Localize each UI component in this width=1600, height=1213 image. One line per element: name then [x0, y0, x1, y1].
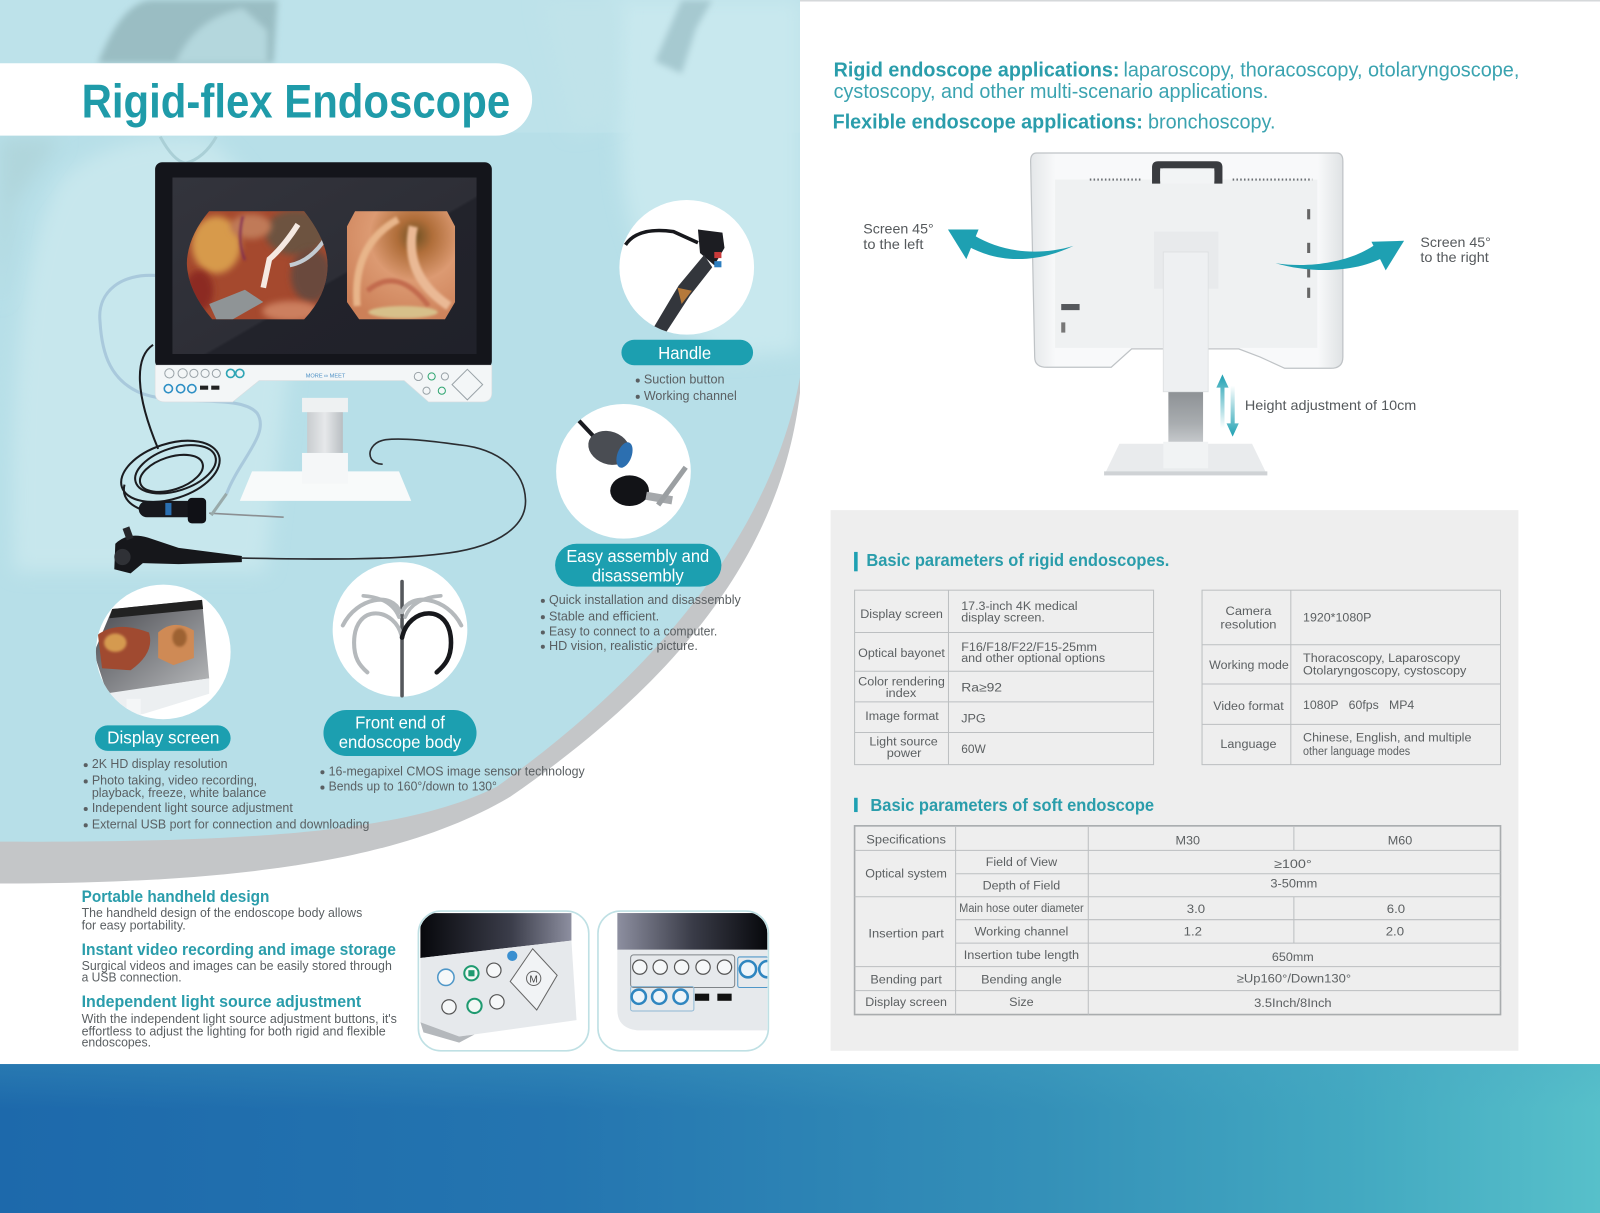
screen image: surgical view	[184, 209, 332, 321]
table: soft endoscope parameters: Insertion part	[868, 927, 945, 941]
table: soft endoscope parameters: Main hose outer diameter	[959, 901, 1084, 915]
icon: monitor rear view	[1031, 153, 1343, 475]
monitor control panel	[155, 365, 492, 402]
panel: Display screen feature	[84, 585, 369, 831]
table: rigid parameters left: Light source	[869, 735, 938, 749]
monitor brand mark: MORE ∞ MEET	[306, 373, 346, 379]
panel: curved grey backing band	[0, 306, 800, 883]
display bullets: External USB port for connection and downloading	[92, 817, 369, 831]
table: soft endoscope parameters: 3.0	[1187, 902, 1205, 916]
heading: soft parameters: Basic parameters of soft endoscope	[870, 795, 1154, 815]
label: screen right: Screen 45°	[1420, 235, 1491, 250]
table: rigid parameters right: 1080P 60fps MP4	[1303, 698, 1415, 712]
assembly bullets: Quick installation and disassembly	[549, 593, 742, 607]
screen image: intestinal view	[345, 209, 457, 321]
assembly bullets	[541, 593, 742, 653]
table: soft endoscope parameters: Bending part	[870, 972, 943, 986]
text block: portable handheld design	[82, 887, 362, 932]
panel: Front end feature	[320, 562, 585, 794]
table: soft endoscope parameters: 6.0	[1387, 902, 1405, 916]
label: screen left: to the left	[863, 237, 924, 252]
table: soft endoscope parameters: Optical system	[865, 866, 947, 880]
text block: independent light source: With the independent light source adjustment buttons, it's	[82, 1012, 397, 1026]
assembly label pill: disassembly	[592, 566, 684, 586]
front end bullets: 16-megapixel CMOS image sensor technology	[329, 764, 585, 778]
table: soft endoscope parameters: Depth of Field	[983, 879, 1060, 893]
display bullets	[84, 757, 369, 831]
table: soft endoscope parameters: Size	[1009, 995, 1034, 1009]
table: rigid parameters right: other language modes	[1303, 744, 1410, 758]
panel: pale blue hero background with doctors	[0, 0, 800, 842]
table: rigid parameters left: F16/F18/F22/F15-25mm	[961, 640, 1097, 654]
display bullets: Independent light source adjustment	[92, 801, 293, 815]
label: screen right	[1420, 235, 1491, 265]
icon: assembly photo	[556, 404, 691, 539]
table: rigid parameters right: Video format	[1213, 699, 1284, 713]
icon: control panel close-up right side: M	[529, 974, 538, 985]
text block: portable handheld design: for easy portability.	[82, 918, 186, 932]
table: rigid parameters left	[855, 590, 1154, 765]
table: soft endoscope parameters: 3.5Inch/8Inch	[1254, 996, 1332, 1010]
table: rigid parameters left: 17.3-inch 4K medical	[961, 599, 1078, 613]
table: rigid parameters left: and other optional options	[961, 651, 1105, 665]
table: rigid parameters left: Display screen	[860, 607, 943, 621]
text block: instant video recording	[82, 940, 396, 984]
footer band	[0, 1064, 1600, 1213]
display bullets: Photo taking, video recording,	[92, 774, 257, 788]
table: rigid parameters right: Chinese, English, and multiple	[1303, 731, 1472, 745]
assembly bullets: Easy to connect to a computer.	[549, 625, 717, 639]
assembly label pill	[555, 544, 721, 587]
table: rigid parameters left: Optical bayonet	[858, 646, 946, 660]
table: rigid parameters right: Otolaryngoscopy, cystoscopy	[1303, 663, 1466, 677]
table: soft endoscope parameters	[855, 826, 1501, 1015]
handle bullets: Suction button	[644, 373, 725, 387]
label: height adjustment: Height adjustment of 10cm	[1245, 398, 1416, 413]
table: rigid parameters left: Color rendering	[858, 675, 945, 689]
table: soft endoscope parameters: 650mm	[1272, 950, 1314, 964]
handle label pill	[621, 340, 753, 365]
icon: handle photo	[619, 200, 754, 337]
table: rigid parameters left: Ra≥92	[961, 681, 1002, 695]
table: rigid parameters right: Language	[1220, 737, 1277, 751]
table: rigid parameters right: Thoracoscopy, Laparoscopy	[1303, 651, 1460, 665]
front end label pill: endoscope body	[339, 732, 462, 752]
assembly bullets: Stable and efficient.	[549, 609, 659, 623]
table: soft endoscope parameters: Field of View	[986, 855, 1057, 869]
text block: instant video recording: Instant video recording and image storage	[82, 940, 396, 959]
icon: control panel close-up left side	[598, 911, 776, 1052]
table: rigid parameters left: index	[886, 686, 916, 700]
text block: independent light source: Independent light source adjustment	[82, 992, 362, 1011]
table: soft endoscope parameters: 3-50mm	[1270, 877, 1317, 891]
table: rigid parameters right: Working mode	[1209, 658, 1289, 672]
title pill	[0, 63, 532, 136]
display bullets: playback, freeze, white balance	[92, 786, 266, 800]
icon: monitor stand	[240, 398, 411, 501]
handle bullets	[636, 373, 737, 403]
icon: articulating tip photo	[333, 562, 467, 697]
table: soft endoscope parameters: M60	[1388, 834, 1413, 848]
icon: monitor front view	[155, 162, 492, 402]
panel: Handle feature	[619, 200, 754, 403]
arrow: height adjustment	[1216, 374, 1239, 437]
assembly bullets: HD vision, realistic picture.	[549, 639, 698, 653]
panel: parameters background	[831, 510, 1518, 1051]
table: rigid parameters left: display screen.	[961, 610, 1045, 624]
table: rigid parameters right: 1920*1080P	[1303, 610, 1371, 624]
table: rigid parameters left: 60W	[961, 742, 986, 756]
table: soft endoscope parameters: Working channel	[974, 925, 1068, 939]
label: screen right: to the right	[1420, 250, 1489, 265]
assembly label pill: Easy assembly and	[566, 546, 709, 566]
text block: applications: cystoscopy, and other multi-scenario applications.	[834, 81, 1268, 103]
handle bullets: Working channel	[644, 389, 737, 403]
text block: applications: laparoscopy, thoracoscopy, otolaryngoscope,	[1123, 60, 1519, 82]
display label pill: Display screen	[107, 728, 219, 748]
table: soft endoscope parameters: Specifications	[866, 833, 946, 847]
display bullets: 2K HD display resolution	[92, 757, 228, 771]
text block: applications: Flexible endoscope applications:	[833, 112, 1143, 134]
table: soft endoscope parameters: 2.0	[1386, 925, 1404, 939]
text block: applications: bronchoscopy.	[1148, 112, 1276, 134]
text block: applications: Rigid endoscope applications:	[834, 60, 1119, 82]
front end label pill: Front end of	[355, 712, 445, 732]
panel: Easy assembly feature	[541, 404, 742, 653]
table: soft endoscope parameters: Insertion tube length	[964, 948, 1079, 962]
table: soft endoscope parameters: 1.2	[1184, 925, 1202, 939]
icon: flexible endoscope with long tube	[114, 439, 526, 573]
title: Rigid-flex Endoscope	[82, 75, 510, 127]
text block: portable handheld design: Portable handheld design	[82, 887, 269, 906]
text block: portable handheld design: The handheld design of the endoscope body allows	[82, 906, 362, 920]
heading: rigid parameters: Basic parameters of rigid endoscopes.	[866, 550, 1169, 570]
text block: instant video recording: a USB connection.	[82, 970, 182, 984]
display label pill	[95, 725, 231, 751]
icon: rigid endoscope camera head	[139, 494, 284, 523]
table: rigid parameters left: power	[887, 746, 921, 760]
table: rigid parameters right: Camera	[1226, 604, 1272, 618]
table: rigid parameters left: Image format	[865, 709, 939, 723]
icon: control panel close-up right side	[418, 911, 590, 1052]
table: rigid parameters right: resolution	[1220, 617, 1277, 631]
front end label pill	[323, 710, 477, 756]
table: soft endoscope parameters: ≥Up160°/Down130°	[1237, 971, 1351, 985]
text block: instant video recording: Surgical videos and images can be easily stored through	[82, 959, 392, 973]
arrow: rotate left	[948, 230, 1073, 259]
arrow: rotate right	[1276, 241, 1404, 270]
label: screen left: Screen 45°	[863, 222, 934, 237]
text block: independent light source: effortless to adjust the lighting for both rigid and flexible	[82, 1024, 386, 1038]
handle label pill: Handle	[658, 343, 711, 363]
front end bullets: Bends up to 160°/down to 130°	[329, 780, 497, 794]
table: rigid parameters right	[1202, 590, 1501, 765]
text block: independent light source: endoscopes.	[82, 1036, 151, 1050]
label: screen left	[863, 222, 934, 252]
front end bullets	[320, 764, 585, 794]
table: soft endoscope parameters: ≥100°	[1274, 857, 1312, 871]
table: soft endoscope parameters: M30	[1176, 834, 1200, 848]
icon: display photo	[94, 585, 231, 724]
icon: blue water tube	[100, 275, 260, 494]
text block: applications	[833, 60, 1519, 134]
text block: independent light source	[82, 992, 397, 1050]
table: soft endoscope parameters: Display screen	[865, 995, 947, 1009]
icon: black camera cable and coil	[113, 345, 227, 513]
table: rigid parameters left: JPG	[961, 711, 986, 725]
table: soft endoscope parameters: Bending angle	[981, 972, 1062, 986]
